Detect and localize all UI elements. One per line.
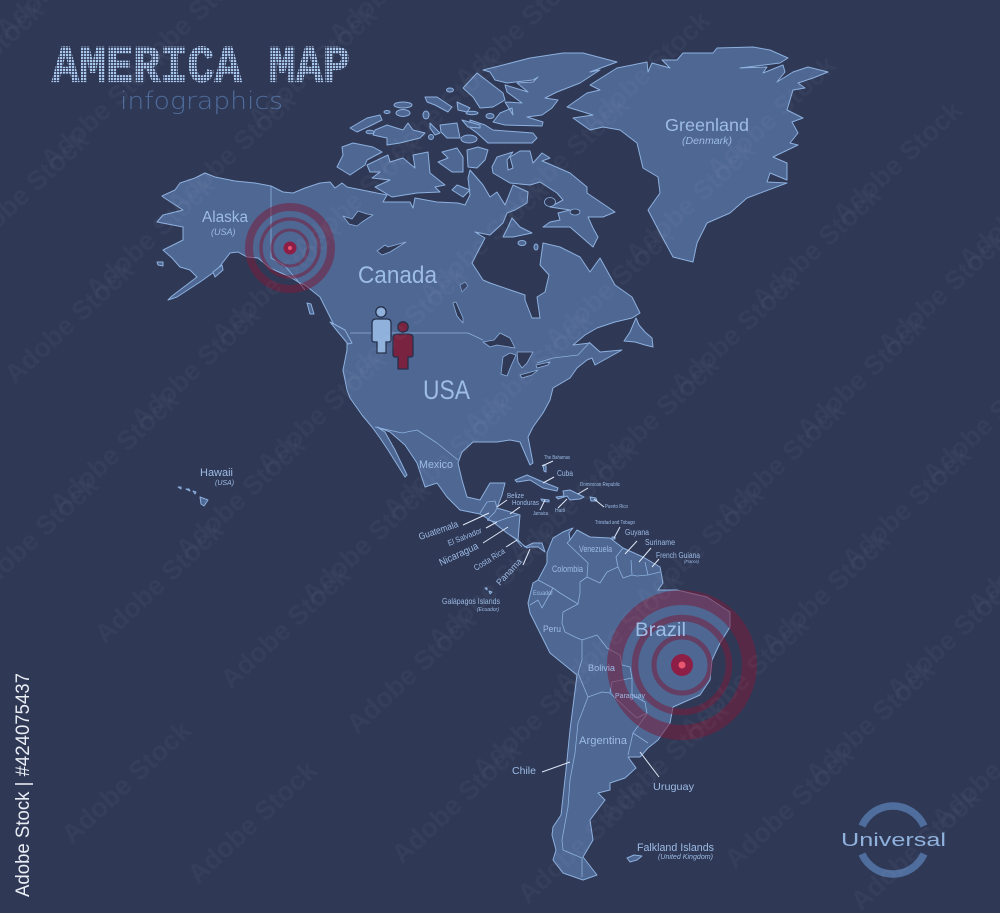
label: Colombia: Colombia — [552, 564, 583, 574]
label: Puerto Rico: Puerto Rico — [605, 504, 628, 510]
label: Guyana: Guyana — [625, 528, 649, 537]
watermark: Adobe Stock — [665, 264, 806, 399]
label: Cuba: Cuba — [557, 469, 573, 478]
watermark: Adobe Stock — [341, 604, 482, 739]
map: South America borders — [530, 540, 660, 877]
label: Dominican Republic: Dominican Republic — [580, 482, 620, 488]
map: Vancouver and coastal islands — [157, 262, 352, 344]
label: Galápagos Islands — [442, 596, 500, 613]
map: South America — [528, 528, 730, 880]
label: Falkland Islands — [637, 842, 714, 861]
watermark: Adobe Stock — [0, 254, 140, 389]
label: Belize: Belize — [507, 493, 524, 500]
label: Nicaragua: Nicaragua — [438, 541, 481, 569]
map: Greenland — [567, 47, 828, 262]
label: Greenland: Greenland — [665, 115, 749, 135]
watermark: Adobe Stock — [701, 49, 842, 184]
watermark: Adobe Stock — [827, 94, 968, 229]
label: Peru: Peru — [543, 624, 561, 634]
leader lines — [463, 461, 659, 777]
watermark: Adobe Stock — [836, 439, 977, 574]
watermark: Adobe Stock — [620, 134, 761, 269]
watermark: Adobe Stock — [674, 609, 815, 744]
watermark: Adobe Stock — [368, 44, 509, 179]
watermark: Adobe Stock — [755, 524, 896, 659]
logo: Universal — [841, 806, 946, 874]
title: AMERICA MAP — [52, 38, 350, 98]
credit: stock id: Adobe Stock | #424075437 — [12, 673, 34, 897]
watermark: Adobe Stock — [242, 0, 383, 134]
watermark: Adobe Stock — [44, 384, 185, 519]
watermark: Adobe Stock — [377, 389, 518, 524]
label: Alaska: Alaska — [202, 209, 248, 226]
label: Trinidad and Tobago: Trinidad and Tobago — [595, 520, 635, 526]
watermark: Adobe Stock — [215, 559, 356, 694]
icon: red person — [393, 322, 413, 369]
label: Galápagos Islands: Galápagos Islands — [442, 596, 500, 606]
watermark: Adobe Stock — [80, 169, 221, 304]
watermark: Adobe Stock — [548, 564, 689, 699]
subtitle: infographics — [120, 87, 283, 115]
label: French Guiana — [656, 551, 700, 564]
watermark: Adobe Stock — [89, 514, 230, 649]
label: Panama: Panama — [494, 556, 524, 587]
watermark: Adobe Stock — [125, 299, 266, 434]
label: French Guiana: French Guiana — [656, 551, 700, 560]
label: Suriname: Suriname — [645, 538, 675, 547]
label: Greenland: (Denmark) — [682, 136, 732, 147]
label: Uruguay: Uruguay — [653, 781, 695, 793]
watermark: Adobe Stock — [35, 39, 176, 174]
map: small outlying islands — [178, 487, 642, 862]
watermark: Adobe Stock — [575, 4, 716, 139]
label: Honduras: Honduras — [512, 498, 539, 507]
label: USA: USA — [423, 375, 470, 405]
watermark: Adobe Stock — [251, 344, 392, 479]
watermark: Adobe Stock — [791, 309, 932, 444]
label: Ecuador: Ecuador — [533, 590, 554, 597]
label: Galápagos Islands: (Ecuador) — [477, 607, 499, 613]
map: Newfoundland — [624, 318, 653, 347]
target: Brazil rings — [614, 598, 750, 732]
label: Argentina: Argentina — [579, 735, 628, 747]
watermark: Adobe Stock — [629, 479, 770, 614]
label: French Guiana: (France) — [684, 559, 699, 564]
watermark: Adobe Stock — [182, 754, 323, 889]
watermark: Adobe Stock — [746, 179, 887, 314]
watermark: Adobe Stock — [539, 219, 680, 354]
watermark: Adobe Stock — [503, 434, 644, 569]
watermark: Adobe Stock — [206, 214, 347, 349]
watermark: Adobe Stock — [467, 649, 608, 784]
label: Alaska — [202, 209, 248, 237]
label: Falkland Islands: (United Kingdom) — [658, 854, 713, 861]
label: Hawaii — [200, 467, 234, 487]
target: Alaska rings — [249, 207, 331, 289]
watermark: Adobe Stock — [710, 394, 851, 529]
watermark: Adobe Stock — [494, 89, 635, 224]
watermark: Adobe Stock — [800, 654, 941, 789]
map: Canadian Arctic islands — [337, 53, 617, 250]
watermark: Adobe Stock — [458, 304, 599, 439]
label: Brazil: Brazil — [635, 620, 686, 641]
label: Mexico: Mexico — [419, 459, 453, 471]
map: Caribbean islands — [515, 465, 615, 539]
map: North America mainland — [157, 170, 640, 552]
watermark: Adobe Stock — [845, 781, 986, 913]
label: Venezuela: Venezuela — [579, 544, 613, 555]
label: Guatemala: Guatemala — [417, 519, 460, 543]
label: Chile: Chile — [512, 765, 536, 777]
map: lakes — [343, 211, 550, 378]
watermark: Adobe Stock — [287, 129, 428, 264]
watermark: Adobe Stock — [332, 259, 473, 394]
watermark: Adobe Stock — [386, 734, 527, 869]
watermark: Adobe Stock — [584, 349, 725, 484]
watermark: Adobe Stock — [170, 429, 311, 564]
label: The Bahamas: The Bahamas — [544, 455, 570, 461]
label: Jamaica: Jamaica — [533, 511, 548, 517]
label: Canada: Canada — [358, 262, 438, 289]
watermark: Adobe Stock — [56, 714, 197, 849]
label: Haiti: Haiti — [555, 508, 565, 514]
label: Greenland — [665, 115, 749, 147]
watermark: Adobe Stock — [593, 694, 734, 829]
watermark: Adobe Stock — [161, 84, 302, 219]
watermark: Adobe Stock — [512, 774, 653, 909]
label: Hawaii: Hawaii — [200, 467, 233, 479]
icon: blue person — [372, 307, 391, 353]
watermark: Adobe Stock — [296, 474, 437, 609]
watermark: Adobe Stock — [422, 519, 563, 654]
watermark: Adobe Stock — [719, 739, 860, 874]
logo: Universal: Universal — [841, 830, 946, 850]
label: Bolivia: Bolivia — [588, 663, 615, 673]
label: Paraguay: Paraguay — [615, 693, 645, 700]
label: Costa Rica: Costa Rica — [472, 546, 507, 573]
label: Alaska: (USA) — [211, 227, 236, 237]
label: Hawaii: (USA) — [215, 480, 234, 487]
label: El Salvador: El Salvador — [446, 526, 483, 548]
watermark: Adobe Stock — [413, 174, 554, 309]
label: Falkland Islands: Falkland Islands — [637, 842, 714, 854]
map: North America borders — [271, 186, 600, 547]
